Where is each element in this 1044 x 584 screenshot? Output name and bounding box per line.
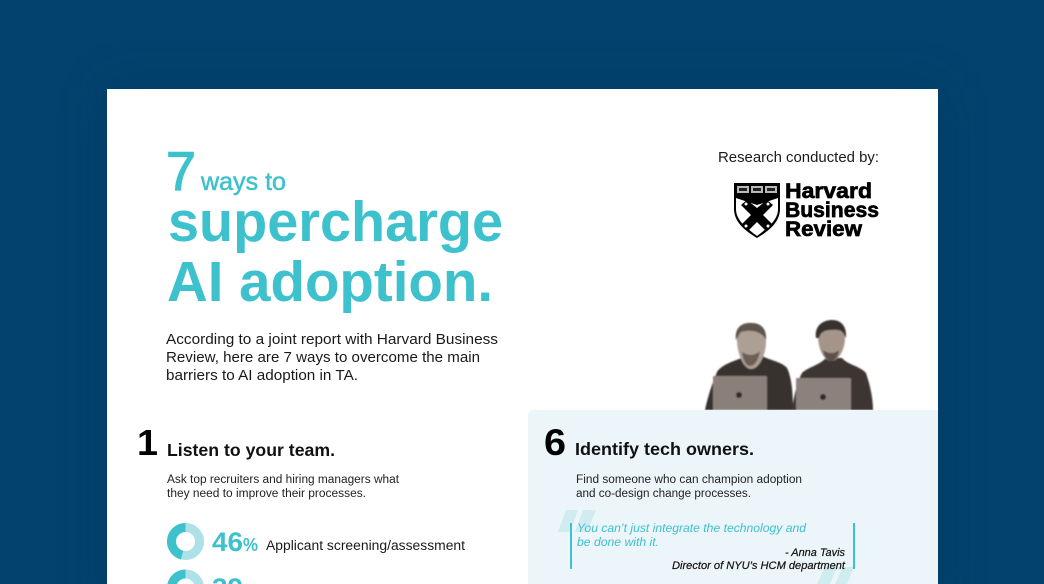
right person xyxy=(792,320,873,410)
wordmark: Business xyxy=(785,198,879,222)
laptop: right xyxy=(796,378,851,410)
title: ways to xyxy=(200,168,286,196)
step 1 description: they need to improve their processes. xyxy=(167,488,366,500)
intro paragraph: barriers to AI adoption in TA. xyxy=(166,368,358,384)
Harvard Business Review logo xyxy=(734,179,879,241)
step 1 section xyxy=(137,422,465,584)
quote rules xyxy=(570,523,855,569)
quote text: be done with it. xyxy=(577,537,659,549)
photo: two people at laptops xyxy=(705,320,873,410)
wordmark: Review xyxy=(785,217,862,241)
wordmark xyxy=(785,179,879,241)
quote attribution: - Anna Tavis xyxy=(785,547,845,559)
intro paragraph: According to a joint report with Harvard Business xyxy=(166,332,498,348)
title xyxy=(166,140,503,314)
step 1 description: Ask top recruiters and hiring managers what xyxy=(167,474,400,486)
quote marks xyxy=(558,510,854,584)
panel: step 6 xyxy=(528,410,938,584)
heading: listen to your team: Listen to your team. xyxy=(167,440,335,460)
donut chart xyxy=(172,574,200,584)
left person xyxy=(705,323,793,410)
number 6: 6 xyxy=(544,422,566,463)
stat: 46 percent xyxy=(172,527,465,557)
laptop: left xyxy=(713,376,767,410)
title: supercharge xyxy=(168,190,503,254)
intro paragraph xyxy=(166,332,498,384)
step 6 description: Find someone who can champion adoption xyxy=(576,474,802,486)
icon: HBR shield xyxy=(734,183,780,238)
step 6 description: and co-design change processes. xyxy=(576,488,751,500)
title: 7 xyxy=(166,140,196,202)
step 1 description xyxy=(167,474,400,500)
quote attribution xyxy=(672,547,846,572)
quote text: You can’t just integrate the technology and xyxy=(577,523,807,535)
title: AI adoption. xyxy=(167,250,493,314)
research credit: Research conducted by: xyxy=(718,150,879,166)
white report page xyxy=(107,89,938,584)
stat: 46 percent: % xyxy=(243,535,258,555)
heading: identify tech owners: Identify tech owners. xyxy=(575,439,754,459)
label: Applicant screening/assessment xyxy=(266,538,465,553)
stat: second, cropped at page edge xyxy=(172,573,243,584)
step 6 description xyxy=(576,474,802,500)
donut chart xyxy=(172,528,200,556)
value: 46 xyxy=(212,527,243,557)
number 1: 1 xyxy=(137,422,158,463)
quote attribution: Director of NYU’s HCM department xyxy=(672,560,846,572)
intro paragraph: Review, here are 7 ways to overcome the main xyxy=(166,350,480,366)
quote text xyxy=(577,523,807,549)
wordmark: Harvard xyxy=(785,179,872,203)
